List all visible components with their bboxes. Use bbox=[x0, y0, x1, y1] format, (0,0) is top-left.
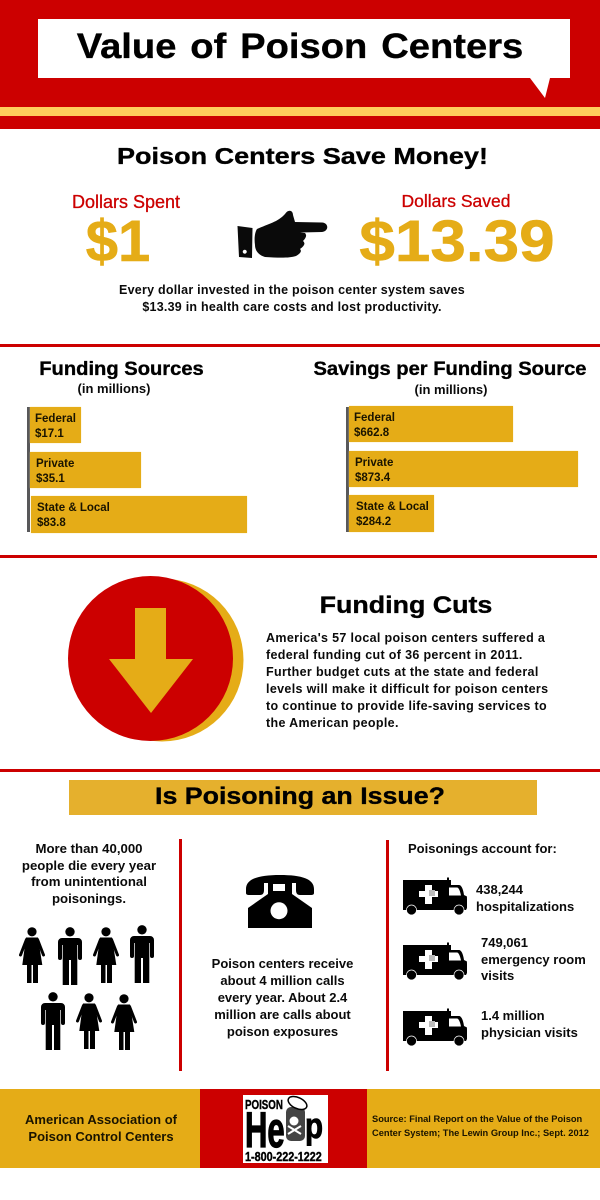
speech bubble tail bbox=[530, 78, 550, 98]
heading: Poison Centers Save Money! bbox=[117, 143, 488, 169]
organisation: American Association of bbox=[25, 1112, 177, 1126]
description: America's 57 local poison centers suffered a bbox=[266, 630, 545, 644]
bar: state and local: State & Local bbox=[37, 502, 110, 514]
axis bbox=[27, 407, 30, 532]
bar: private bbox=[349, 451, 578, 487]
bar: private: $35.1 bbox=[36, 473, 65, 485]
bar: state and local: $284.2 bbox=[356, 516, 391, 528]
bar: federal bbox=[349, 406, 513, 442]
heading: Funding Cuts bbox=[320, 592, 492, 619]
section: funding cuts bbox=[68, 576, 548, 742]
description bbox=[266, 630, 548, 730]
value: $1: $1 bbox=[86, 209, 150, 274]
bar: federal: Federal bbox=[35, 413, 76, 425]
column: calls bbox=[212, 875, 353, 1039]
text: people die every year bbox=[22, 858, 156, 873]
source: Center System; The Lewin Group Inc.; Sept. 2012 bbox=[372, 1128, 589, 1138]
text heading: Poisonings account for: bbox=[408, 841, 557, 856]
text: emergency room visits: emergency room bbox=[481, 952, 586, 967]
bar: federal bbox=[30, 407, 81, 443]
text bbox=[212, 956, 353, 1039]
text: emergency room visits: 749,061 bbox=[481, 935, 528, 950]
logo word: p: p bbox=[305, 1104, 323, 1146]
text: More than 40,000 bbox=[35, 841, 142, 856]
footer bbox=[0, 1089, 600, 1168]
bar: private: Private bbox=[36, 458, 74, 470]
text: about 4 million calls bbox=[220, 973, 345, 988]
text: million are calls about bbox=[214, 1007, 351, 1022]
subheading: (in millions) bbox=[78, 381, 150, 396]
title speech bubble bbox=[38, 19, 570, 78]
description: to continue to provide life-saving services to bbox=[266, 698, 547, 712]
text: hospitalizations: 438,244 bbox=[476, 882, 523, 897]
value: $13.39: $13.39 bbox=[359, 209, 555, 274]
icon: poison bottle bbox=[286, 1096, 308, 1141]
column: poisonings account for bbox=[403, 841, 586, 1046]
text: emergency room visits bbox=[481, 935, 586, 983]
label: dollars spent: Dollars Spent bbox=[72, 192, 180, 212]
bar: state and local: State & Local bbox=[356, 501, 429, 513]
text: physician visits: 1.4 million bbox=[481, 1008, 545, 1023]
text: poisonings. bbox=[52, 891, 126, 906]
header banner bbox=[0, 0, 600, 129]
bar: state and local bbox=[349, 495, 434, 532]
description bbox=[119, 282, 465, 314]
description: Every dollar invested in the poison center system saves bbox=[119, 282, 465, 296]
text: emergency room visits: visits bbox=[481, 968, 514, 983]
description: federal funding cut of 36 percent in 2011. bbox=[266, 648, 523, 662]
chart: savings per funding source bbox=[313, 359, 587, 532]
logo word: poison: POISON bbox=[245, 1098, 283, 1112]
description: $13.39 in health care costs and lost productivity. bbox=[142, 300, 442, 314]
axis bbox=[346, 407, 349, 532]
organisation: Poison Control Centers bbox=[28, 1128, 174, 1144]
heading: Savings per Funding Source bbox=[313, 359, 587, 380]
organisation bbox=[25, 1112, 177, 1144]
icon: ambulance bbox=[403, 1008, 467, 1046]
bar: federal: $662.8 bbox=[354, 427, 389, 439]
description: Further budget cuts at the state and federal bbox=[266, 664, 539, 678]
description: levels will make it difficult for poison centers bbox=[266, 682, 548, 696]
banner: is poisoning an issue bbox=[69, 780, 537, 815]
text: hospitalizations: hospitalizations bbox=[476, 899, 574, 914]
text: hospitalizations bbox=[476, 882, 574, 914]
red panel bbox=[200, 1089, 367, 1168]
logo word: he: He bbox=[245, 1102, 285, 1158]
bar: private: $873.4 bbox=[355, 472, 390, 484]
icon: pointing hand bbox=[238, 210, 328, 258]
gold stripe bbox=[0, 107, 600, 116]
label: dollars saved: Dollars Saved bbox=[402, 191, 510, 211]
icon: down arrow circle bbox=[68, 576, 244, 742]
bar: state and local: $83.8 bbox=[37, 517, 66, 529]
bar: federal: Federal bbox=[354, 412, 395, 424]
description: the American people. bbox=[266, 716, 399, 730]
column: deaths bbox=[19, 841, 156, 1050]
icon: telephone bbox=[246, 875, 314, 928]
bar: private: Private bbox=[355, 457, 393, 469]
logo: poison help bbox=[243, 1095, 328, 1163]
heading: Funding Sources bbox=[39, 359, 204, 380]
text bbox=[22, 841, 156, 906]
bar: state and local bbox=[31, 496, 247, 533]
bar: private bbox=[30, 452, 141, 488]
source: Source: Final Report on the Value of the Poison bbox=[372, 1114, 582, 1124]
text: physician visits: physician visits bbox=[481, 1024, 578, 1040]
source bbox=[372, 1114, 589, 1138]
section: poison centers save money bbox=[72, 143, 555, 314]
title: Value of Poison Centers bbox=[77, 26, 523, 66]
text: from unintentional bbox=[31, 874, 147, 889]
text: every year. About 2.4 bbox=[218, 990, 347, 1005]
text: Poison centers receive bbox=[212, 956, 353, 971]
bar: federal: $17.1 bbox=[35, 428, 64, 440]
subheading: (in millions) bbox=[415, 382, 487, 397]
text: physician visits bbox=[481, 1008, 578, 1040]
icon: ambulance bbox=[403, 942, 467, 980]
heading: Is Poisoning an Issue? bbox=[155, 783, 445, 810]
icon: ambulance bbox=[403, 878, 467, 915]
chart: funding sources bbox=[27, 359, 248, 534]
icon: people bbox=[19, 925, 154, 1050]
text: poison exposures bbox=[227, 1024, 338, 1039]
